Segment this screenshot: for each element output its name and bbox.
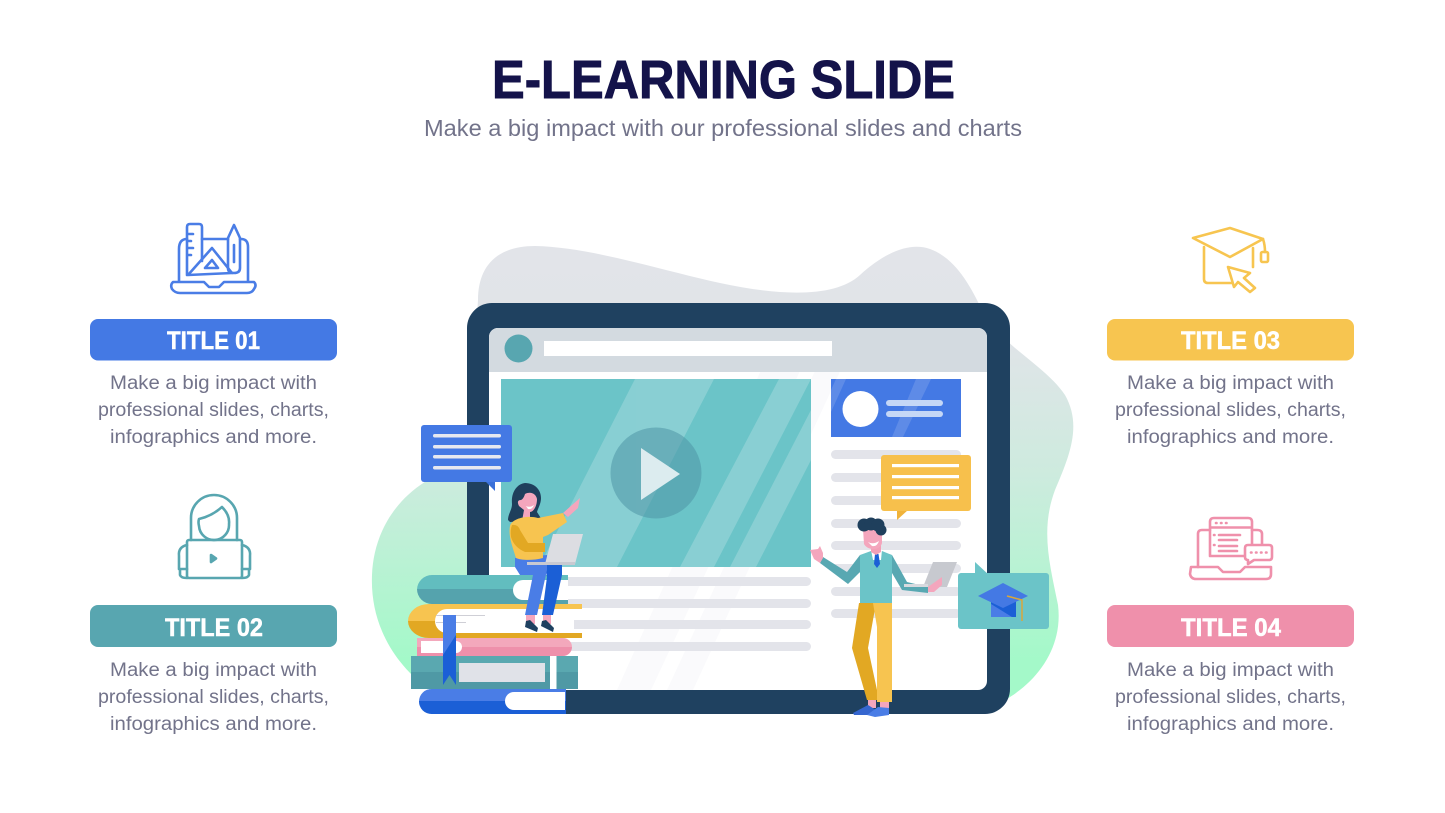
description: Make a big impact with [1127,660,1334,681]
speech bubble: yellow [881,455,971,520]
arms [820,555,860,584]
description: Make a big impact with [1127,373,1334,394]
faint screen glare [617,328,860,690]
subtitle: Make a big impact with our professional slides and charts [424,115,1022,141]
sweater [860,551,892,603]
description: professional slides, charts, [1115,687,1346,708]
description: infographics and more. [110,427,317,448]
teal upright book [411,656,578,689]
hand left [810,546,823,563]
speech bubble: blue [421,425,512,491]
description: professional slides, charts, [98,687,329,708]
man presenter [810,518,957,717]
book stack [408,575,582,714]
neck and face [518,493,537,521]
tablet [467,303,1010,714]
woman on books [508,483,583,632]
icon: laptop with browser and chat [1190,518,1272,579]
label bar [90,605,337,647]
text lines right [831,450,961,618]
blue profile card [831,379,961,437]
blue book [419,689,566,714]
screen [489,328,987,690]
icon: learner with laptop [179,495,250,578]
shoes [525,620,538,632]
icon: laptop with drafting tools [171,224,256,293]
icon: graduation cap [978,583,1028,621]
hand right [928,577,942,592]
address bar [544,341,832,356]
description: infographics and more. [1127,427,1334,448]
description [98,373,329,448]
sweater [510,513,567,560]
laptop [545,534,583,564]
hair [508,483,542,522]
tie [874,554,880,568]
trousers light [873,603,892,702]
description [1115,660,1346,735]
video panel [501,379,811,567]
pink book [417,638,572,656]
description: infographics and more. [110,714,317,735]
panel: item 03 [1107,228,1354,448]
description: professional slides, charts, [1115,400,1346,421]
neck and face [871,545,881,555]
label text: TITLE 04 [1181,614,1281,642]
label text: TITLE 02 [165,614,263,642]
icon: graduation cap with cursor [1193,228,1268,292]
dark sleeve [511,525,545,552]
speech bubble: teal with cap [958,562,1049,629]
label bar [1107,319,1354,360]
label text: TITLE 03 [1181,327,1280,355]
play button [610,428,702,518]
shoes [853,705,876,715]
avatar dot [504,334,532,362]
description: infographics and more. [1127,714,1334,735]
description: Make a big impact with [110,373,317,394]
description [98,660,329,735]
description: professional slides, charts, [98,400,329,421]
label bar [1107,605,1354,647]
teal book [417,575,568,604]
laptop [923,562,957,587]
label bar [90,319,337,360]
collar [871,547,882,560]
hair [858,518,886,536]
background blob [372,246,1073,700]
label text: TITLE 01 [167,327,260,355]
title: E-LEARNING SLIDE [492,50,955,110]
text lines left [560,577,811,651]
ankles [868,699,889,708]
description: Make a big impact with [110,660,317,681]
leg light [515,555,547,615]
raised hand [563,498,580,517]
panel: item 01 [90,224,337,448]
bookmark [443,615,456,685]
panel: item 04 [1107,518,1354,735]
trousers dark [852,603,877,700]
browser header [489,328,987,372]
leg dark [542,557,562,615]
ankles [526,614,551,624]
yellow book [408,604,582,638]
panel: item 02 [90,495,337,735]
description [1115,373,1346,448]
